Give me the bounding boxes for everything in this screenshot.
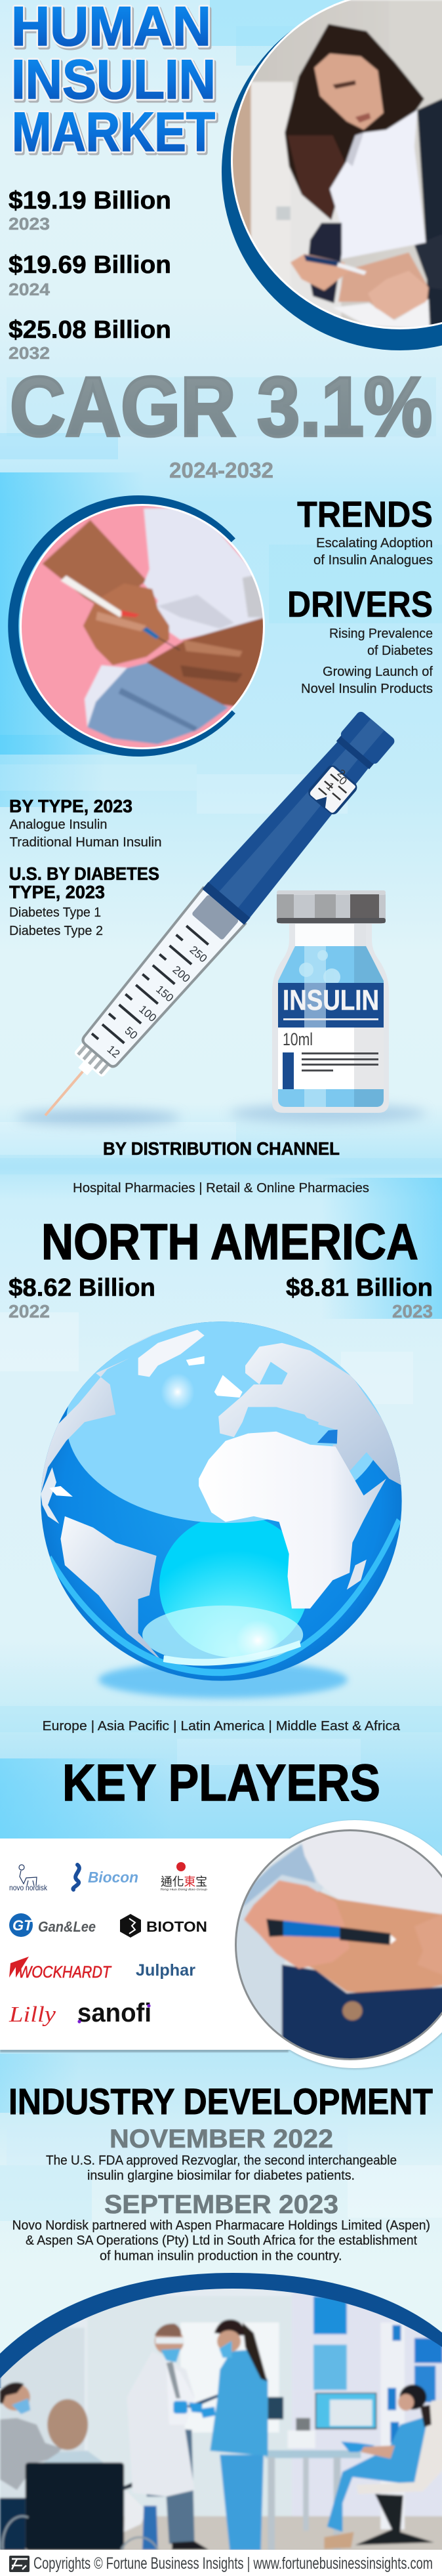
scale numbers: 100	[136, 1003, 159, 1024]
south america	[60, 1516, 162, 1661]
caribbean	[41, 1467, 59, 1524]
north america 2022	[9, 1274, 155, 1321]
development: September 2023: Novo Nordisk partnered with Aspen Pharmacare Holdings Limited (Aspen)	[12, 2218, 430, 2233]
vial label: 10ml	[283, 1029, 313, 1049]
by distribution channel: BY DISTRIBUTION CHANNEL	[103, 1138, 340, 1159]
syringe barrel	[76, 888, 245, 1073]
trends	[297, 493, 433, 568]
eurasia and upper landmass	[218, 1343, 403, 1486]
drivers: Rising Prevalence	[329, 627, 433, 641]
north america	[41, 1358, 130, 1493]
shadow under pen and vial	[16, 1104, 426, 1125]
market value 2032	[9, 316, 171, 363]
logo: Tong Hua Dong Bao: Tong Hua Dong Bao Group	[160, 1888, 208, 1891]
photo: abdomen and insulin pen	[231, 1829, 442, 2068]
logo: Gan&Lee: Gan&Lee	[38, 1919, 96, 1935]
logo: Julphar: Julphar	[136, 1961, 195, 1980]
trends: of Insulin Analogues	[313, 553, 433, 568]
upper ocean	[66, 1321, 385, 1523]
scale numbers: 50	[123, 1024, 140, 1042]
vial glass	[272, 922, 389, 1113]
north america 2023: $8.81 Billion	[286, 1274, 433, 1302]
vial bottom liquid	[278, 1089, 384, 1107]
U.S. by diabetes type: U.S. BY DIABETES	[9, 863, 159, 884]
key players heading: KEY PLAYERS	[62, 1753, 380, 1812]
market value 2032: $25.08 Billion	[9, 316, 171, 344]
north america 2022: $8.62 Billion	[9, 1274, 155, 1302]
by distribution channel: Hospital Pharmacies | Retail & Online Pharmacies	[73, 1181, 369, 1195]
logo: Bioton	[120, 1914, 207, 1938]
development: November 2022: insulin glargine biosimilar for diabetes patients.	[87, 2169, 355, 2183]
logo: Biocon	[73, 1865, 138, 1890]
dose window: 0	[336, 774, 350, 787]
madagascar	[347, 1560, 367, 1590]
scale ticks	[92, 924, 209, 1054]
market value 2023: 2023	[9, 214, 50, 234]
drivers: of Diabetes	[367, 644, 433, 658]
lower ocean	[159, 1514, 309, 1657]
by type: Traditional Human Insulin	[9, 835, 162, 850]
panel: key players logos and photo	[0, 1820, 442, 2069]
iceland	[186, 1356, 205, 1365]
north america 2023	[286, 1274, 433, 1321]
plunger	[191, 894, 239, 940]
logo: Wockhardt	[9, 1957, 111, 1982]
pen body	[203, 737, 374, 924]
photo: woman injecting insulin pen	[222, 0, 442, 350]
vial liquid	[278, 946, 384, 984]
logo: novo nordisk: novo nordisk	[9, 1883, 48, 1892]
logo: Gan&Lee	[9, 1913, 96, 1937]
logo: Lilly: Lilly	[9, 2003, 56, 2027]
market value 2024: 2024	[9, 280, 50, 299]
title: INSULIN	[13, 51, 218, 112]
market value 2024: $19.69 Billion	[9, 251, 171, 279]
title: INSULIN	[11, 49, 216, 110]
insulin pen illustration	[24, 707, 399, 1133]
logo: Tong Hua Dong Bao	[160, 1862, 208, 1891]
trends: Escalating Adoption	[316, 536, 433, 551]
footer logo	[9, 2556, 30, 2572]
scale numbers: 200	[171, 963, 193, 985]
title	[11, 0, 218, 165]
title: MARKET	[12, 101, 215, 163]
scale numbers: 150	[153, 983, 176, 1005]
by distribution channel	[73, 1138, 369, 1195]
logo: Gan&Lee: GT	[12, 1917, 33, 1934]
insulin vial	[272, 890, 389, 1113]
logo: Wockhardt: WOCKHARDT	[18, 1963, 111, 1982]
drivers: Growing Launch of	[323, 665, 433, 679]
photo: hospital staff and patient	[0, 2270, 442, 2558]
globe	[41, 1321, 403, 1681]
needle hub	[68, 1041, 113, 1084]
north america 2023: 2023	[392, 1301, 433, 1321]
logo: Bioton: BIOTON	[146, 1919, 207, 1935]
glints	[162, 1375, 193, 1409]
title: INSULIN	[11, 49, 216, 110]
development: September 2023: & Aspen SA Operations (Pty) Ltd in South Africa for the establishment	[26, 2233, 417, 2248]
bubbles	[299, 950, 340, 986]
U.S. by diabetes type: Diabetes Type 2	[9, 924, 103, 938]
glass rim	[49, 1520, 399, 1672]
by type	[9, 796, 162, 850]
blue arch	[0, 2273, 442, 2388]
vial label: INSULIN	[283, 984, 379, 1016]
north america 2022: 2022	[9, 1301, 50, 1321]
development: September 2023	[12, 2190, 430, 2264]
logo: novo nordisk	[9, 1865, 48, 1892]
vial cap	[277, 890, 386, 924]
by type: BY TYPE, 2023	[9, 796, 132, 816]
dose window: 2	[335, 767, 348, 780]
drivers	[287, 583, 433, 696]
logo: Biocon: Biocon	[88, 1869, 138, 1886]
globe shadow	[98, 1661, 348, 1698]
development: September 2023: of human insulin production in the country.	[100, 2249, 342, 2264]
britain	[214, 1375, 243, 1398]
development: November 2022	[46, 2125, 397, 2183]
drivers: Novel Insulin Products	[301, 682, 433, 696]
vial label	[278, 983, 384, 1089]
white panel	[0, 1820, 442, 2069]
market value 2032: 2032	[9, 343, 50, 363]
pen cap	[335, 710, 396, 770]
CAGR headline: 2024-2032	[169, 458, 273, 482]
development: September 2023: SEPTEMBER 2023	[104, 2190, 338, 2219]
development: November 2022: NOVEMBER 2022	[110, 2125, 333, 2153]
footer	[0, 2550, 442, 2576]
market value 2024	[9, 251, 171, 299]
scale numbers: 250	[188, 944, 209, 965]
U.S. by diabetes type	[9, 863, 159, 938]
photo: syringe injection in abdomen	[8, 495, 265, 757]
regions list: Europe | Asia Pacific | Latin America | Middle East & Africa	[42, 1719, 401, 1734]
logo: sanofi: sanofi	[77, 1999, 151, 2027]
scale numbers: 12	[105, 1043, 122, 1060]
dose window: 1	[324, 779, 336, 793]
market value 2023	[9, 187, 171, 234]
by type: Analogue Insulin	[9, 818, 108, 832]
scale numbers	[104, 944, 209, 1064]
title: MARKET	[13, 103, 216, 165]
development: November 2022: The U.S. FDA approved Rezvoglar, the second interchangeable	[46, 2153, 397, 2168]
market value 2023: $19.19 Billion	[9, 187, 171, 215]
U.S. by diabetes type: Diabetes Type 1	[9, 905, 101, 920]
title: MARKET	[12, 101, 215, 163]
needle	[45, 1068, 86, 1115]
africa	[199, 1432, 386, 1608]
U.S. by diabetes type: TYPE, 2023	[9, 882, 105, 902]
logo: Tong Hua Dong Bao: 通化東宝	[161, 1875, 207, 1888]
greenland	[138, 1330, 205, 1377]
dose window	[306, 759, 363, 817]
